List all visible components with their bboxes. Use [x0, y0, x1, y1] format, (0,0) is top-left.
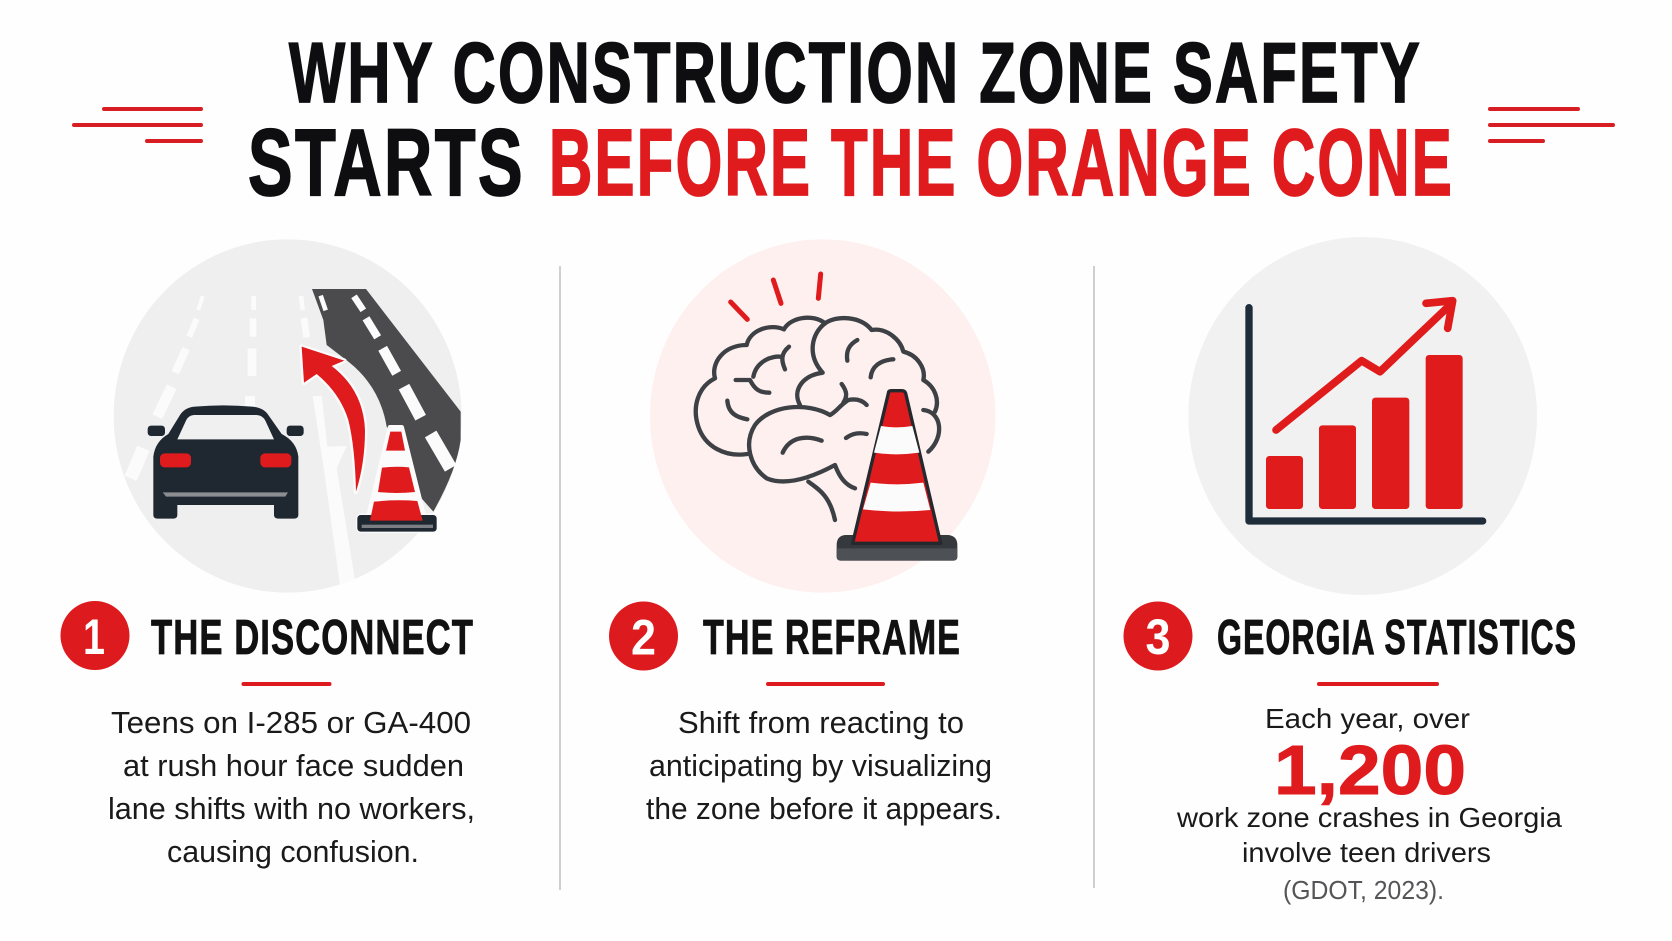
- chart axes: [1249, 308, 1483, 521]
- statistic description: involve teen drivers: [1242, 837, 1491, 868]
- statistic description: work zone crashes in Georgia: [1176, 802, 1562, 833]
- icon part: red curved arrow: [302, 347, 365, 492]
- body text 2: the zone before it appears.: [646, 791, 1002, 826]
- body text 2: anticipating by visualizing: [649, 748, 992, 783]
- heading 2: THE REFRAME: [703, 611, 961, 665]
- underline 1: [242, 682, 332, 686]
- badge 1: 1: [83, 609, 105, 665]
- panel: georgia statistics: [1124, 602, 1577, 905]
- icon part: car rear view: [148, 405, 304, 519]
- title: STARTS: [248, 110, 525, 216]
- underline 2: [766, 682, 885, 686]
- icon part: red alert ticks: [731, 274, 821, 319]
- body text 2: Shift from reacting to: [678, 705, 964, 740]
- body text 1: Teens on I-285 or GA-400: [111, 705, 471, 740]
- badge 2: [609, 602, 678, 670]
- statistic description: [1176, 802, 1562, 868]
- panel: the reframe: [609, 602, 1002, 826]
- badge 3: [1124, 602, 1192, 670]
- title: [248, 26, 1454, 216]
- icon part: large traffic cone: [837, 391, 957, 561]
- body text 1: causing confusion.: [167, 834, 419, 869]
- source citation: (GDOT, 2023).: [1283, 875, 1444, 905]
- underline 3: [1317, 682, 1439, 686]
- big number: 1,200: [1274, 731, 1466, 809]
- speed lines left: [72, 107, 203, 143]
- panel: the disconnect: [60, 601, 475, 869]
- heading 1: THE DISCONNECT: [151, 611, 474, 665]
- body text 1: at rush hour face sudden: [123, 748, 464, 783]
- body text 2: [646, 705, 1002, 826]
- body text 1: lane shifts with no workers,: [108, 791, 475, 826]
- icon: brain with traffic cone: [650, 239, 995, 593]
- speed lines right: [1488, 107, 1615, 143]
- chart bars: [1266, 355, 1463, 509]
- trend arrow: [1276, 301, 1453, 430]
- badge 2: 2: [631, 610, 656, 666]
- icon: car changing lanes near a cone: [114, 239, 462, 593]
- icon: rising bar chart: [1188, 237, 1537, 595]
- badge 3: 3: [1146, 609, 1170, 665]
- icon part: brain outline: [696, 318, 939, 520]
- body text 1: [108, 705, 475, 869]
- statistic intro: Each year, over: [1265, 703, 1470, 734]
- icon part: small traffic cone: [357, 427, 437, 532]
- badge 1: [60, 601, 130, 670]
